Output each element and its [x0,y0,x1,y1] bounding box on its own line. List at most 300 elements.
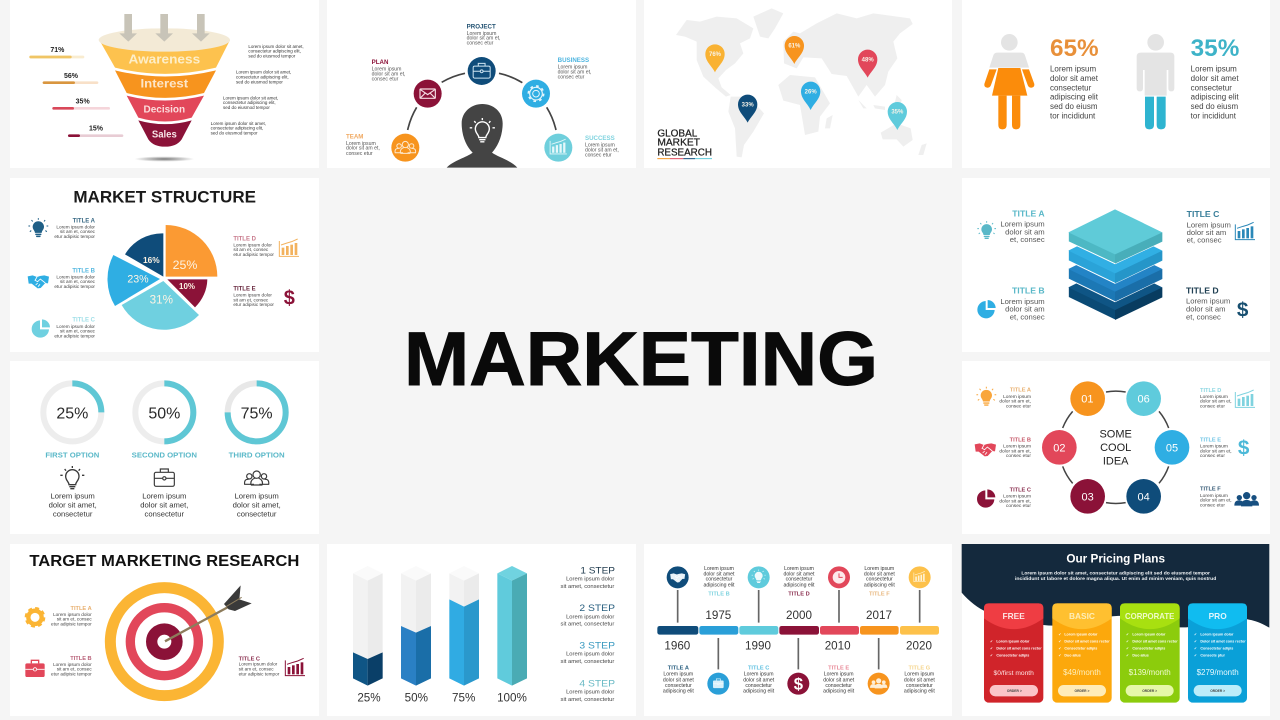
timeline years [664,609,932,652]
stat: 65% [1050,35,1099,120]
legend: title C: etur adipisic tempor [54,334,95,339]
legend: title A [977,208,1045,244]
legend: title B: Lorem ipsum [1003,444,1031,450]
legend: title A [976,387,1031,409]
ring: 25% first option [43,383,101,460]
stat: 65%: tor incididunt [1050,111,1096,120]
stat: 65%: Lorem ipsum [1050,65,1096,74]
step list: sit amet, consectetur [561,584,614,590]
map pins: 48% [862,57,874,63]
option descriptions: dolor sit amet, [49,500,97,509]
numbered nodes: 06 [1138,394,1150,406]
timeline titles and text: dolor sit amet [904,677,935,683]
panel: market structure [10,178,319,352]
pie chart: 31% [150,293,173,306]
option descriptions: dolor sit amet, [140,500,188,509]
numbered nodes: 05 [1166,442,1178,454]
bar: 100% [497,566,527,704]
legend: title C: etur adipisic tempor [239,671,280,676]
legend: title E: $ [284,287,295,309]
stat: 65%: 65% [1050,35,1099,62]
card: basic: ✓ [1058,647,1061,651]
timeline titles and text: dolor sit amet [663,677,694,683]
business node: Lorem ipsum [558,65,587,71]
legend: title B: etur adipisic tempor [51,672,92,677]
legend: title A: Lorem ipsum dolor [53,612,92,617]
card: corporate: Duo alius [1132,654,1149,658]
legend: title C [977,487,1031,509]
legend: title C: dolor sit am et, [999,498,1031,504]
legend: title C: Lorem ipsum dolor [239,662,278,667]
success node [544,134,619,162]
legend: title B [975,437,1031,459]
legend: title D: Lorem ipsum [1186,296,1230,305]
icon: outline people [245,471,269,485]
ring: 75% third option [228,383,286,460]
team node: Lorem ipsum [346,141,376,147]
card: corporate: ✓ [1126,633,1129,637]
stat: 65%: sed do eiusm [1050,102,1098,111]
timeline titles and text: consectetur [786,577,813,583]
legend: title C: TITLE C [1010,487,1031,493]
step list: sit amet, consectetur [561,621,614,627]
project node: consec etur [467,41,494,47]
cycle connectors [1063,391,1169,504]
legend: title E: dolor sit am et, [1200,448,1232,454]
step list: Lorem ipsum dolor [566,614,614,620]
legend: title E: $ [1238,437,1250,460]
timeline titles and text: Lorem ipsum [663,672,693,678]
funnel descriptions: consectetur adipiscing elit, [211,126,263,131]
legend: title A [27,606,92,627]
pie chart: 25% [173,258,197,272]
bar: 75% [449,566,479,704]
pie chart: 16% [143,255,160,265]
business node: consec etur [558,75,585,81]
timeline titles and text: TITLE A [668,665,689,671]
stat: 35%: Lorem ipsum [1191,65,1237,74]
center label [1099,428,1132,467]
legend: title D [1200,388,1255,409]
card: corporate: ✓ [1126,654,1129,658]
legend: title A [28,218,96,239]
card: corporate: ✓ [1126,647,1129,651]
legend: title C: TITLE C [72,318,96,324]
bar: 25%: 25% [357,691,381,704]
timeline years: 2020 [906,639,932,652]
panel: sales funnel [10,0,319,168]
timeline titles and text: Lorem ipsum [904,672,934,678]
timeline bar [657,626,939,635]
legend: title E [233,286,295,309]
card: pro: ORDER > [1210,689,1225,693]
funnel chart: Decision [143,105,185,116]
percentage bars: 56% [64,73,79,80]
step list: 2 STEP [579,603,615,613]
legend: title B: Lorem ipsum dolor [56,274,95,279]
card: pro: Consecte ptur [1200,654,1225,658]
icon: outline bulb [60,466,84,489]
heading: market structure: MARKET STRUCTURE [73,187,256,206]
team node [346,134,419,162]
team node: consec etur [346,151,373,157]
legend: title C: TITLE C [1187,209,1220,219]
card: basic: BASIC [1069,611,1095,621]
card: basic: ORDER > [1075,689,1089,693]
legend: title B: sit am et, consec [60,279,96,284]
icon: outline briefcase [154,469,174,486]
timeline titles and text: Lorem ipsum [864,566,894,572]
legend: title D: et, consec [1186,312,1221,321]
numbered nodes: 03 [1082,491,1094,503]
timeline titles and text: consectetur [665,683,692,689]
card: pro: ✓ [1194,647,1197,651]
heading: global market research: GLOBAL [657,129,698,140]
stat: 35% [1191,35,1239,120]
card: free: ✓ [990,654,993,658]
card: corporate: Lorem ipsum dolor [1132,633,1166,637]
card: corporate: Consectetur adipis [1132,647,1165,651]
step list: 4 STEP [579,679,615,689]
percentage bars: 71% [50,47,65,54]
legend: title C [1187,209,1255,245]
panel: pricing plans [962,544,1270,716]
icon: funnel arrows [119,14,210,42]
legend: title A: dolor sit am [1005,227,1045,236]
timeline titles and text: TITLE G [908,665,931,671]
legend: title D: TITLE D [1200,388,1221,394]
legend: title E: TITLE E [233,286,256,292]
stat: 35%: consectetur [1191,83,1232,92]
legend: title E: consec etur [1200,453,1225,459]
business node [522,57,591,108]
timeline titles and text: dolor sit amet [704,571,735,577]
legend: title B: etur adipisic tempor [54,284,95,289]
timeline titles and text: TITLE F [869,591,890,597]
legend: title A: Lorem ipsum [1000,220,1045,229]
timeline titles and text: adipiscing elit [743,689,775,695]
ring: 50% second option: SECOND OPTION [132,453,197,460]
legend: title B: Lorem ipsum dolor [53,662,92,667]
panel: world map [644,0,952,168]
option descriptions: consectetur [145,510,185,519]
legend: title C: Lorem ipsum [1187,221,1231,230]
panel: gender split [962,0,1270,168]
plan node: PLAN [372,59,389,66]
funnel chart: Sales [152,130,177,141]
timeline node icons: $ [794,675,804,694]
step list: 3 STEP [579,640,615,650]
icon: head with bulb [447,104,517,168]
timeline titles and text: consectetur [745,683,772,689]
card: free: ORDER > [1007,689,1022,693]
legend: title A: TITLE A [71,606,92,612]
pie chart: 23% [127,273,149,285]
arc connectors [408,73,556,130]
map pins: 33% [742,102,754,108]
timeline titles and text: TITLE D [788,591,810,597]
card: basic: Duo alius [1064,654,1081,658]
success node: consec etur [585,152,612,158]
funnel descriptions: sed do eiusmod tempor [211,131,258,136]
card: corporate: CORPORATE [1125,611,1175,621]
legend: title E: Lorem ipsum dolor [233,293,272,298]
panel: isometric bars [327,544,636,716]
legend: title A: consec etur [1006,403,1031,409]
funnel descriptions: consectetur adipiscing elit, [248,49,301,54]
project node: Lorem ipsum [467,31,496,37]
pie chart: 10% [179,282,195,291]
timeline titles and text: dolor sit amet [864,571,895,577]
timeline titles and text: adipiscing elit [704,582,735,588]
map pins [705,36,907,130]
legend: title A: dolor sit am et, [999,399,1031,405]
step list: sit amet, consectetur [561,659,614,665]
legend: title A: sit am et, consec [60,229,96,234]
legend: title B: dolor sit am et, [999,448,1031,454]
team node: dolor sit am et, [346,146,380,152]
center label: IDEA [1103,455,1129,467]
percentage bars: 15% [89,126,104,133]
card: free: Lorem ipsum dolor [996,639,1030,643]
pricing subtitle [1015,570,1216,582]
legend: title C: consec etur [1006,503,1031,509]
timeline titles and text: consectetur [706,577,733,583]
card: basic [1052,603,1112,703]
step list: 1 STEP [580,565,615,575]
card: basic: ✓ [1058,633,1061,637]
stat: 35%: 35% [1191,35,1239,62]
legend: title B: dolor sit am [1005,305,1045,314]
bar: 50% [401,566,431,704]
timeline titles and text: consectetur [825,683,852,689]
map pins: 76% [709,52,722,58]
card: pro: Dolor sit amet cons rector [1200,640,1246,644]
card: pro: $279/month [1197,668,1239,677]
timeline titles and text: Lorem ipsum [704,566,734,572]
card: basic: ✓ [1058,654,1061,658]
legend: title B [977,286,1045,321]
step list: sit amet, consectetur [561,697,614,703]
funnel descriptions: consectetur adipiscing elit, [223,100,276,105]
layer stack [1068,209,1162,320]
timeline titles and text: dolor sit amet [743,677,775,683]
ring: 75% third option: 75% [241,405,273,422]
card: basic: Consectetur adipis [1064,647,1097,651]
legend: title C: dolor sit am [1187,228,1226,237]
panel: hexagon cycle [962,361,1270,534]
option descriptions: Lorem ipsum [51,491,95,500]
center label: COOL [1100,442,1131,454]
project node: PROJECT [467,23,496,30]
step list: Lorem ipsum dolor [566,690,614,696]
percentage bars [29,47,123,137]
legend: title A: etur adipisic tempor [51,622,92,627]
funnel descriptions: sed do eiusmod tempor [236,79,283,84]
business node: BUSINESS [558,57,589,64]
option descriptions: dolor sit amet, [233,500,281,509]
timeline node icons [667,566,931,695]
panel: target marketing research [10,544,319,716]
success node: dolor sit am et, [585,147,619,153]
heading: target marketing research: TARGET MARKETING RESEARCH [29,553,299,570]
timeline titles and text: Lorem ipsum [824,672,854,678]
legend: title D: TITLE D [233,236,257,242]
numbered nodes: 01 [1081,394,1093,406]
option descriptions: consectetur [53,510,93,519]
bar: 100%: 100% [497,691,527,704]
card: pro: Consectetur adipis [1200,647,1233,651]
legend: title F [1200,487,1259,508]
legend: title E: sit am et, consec [233,297,269,302]
percentage bars: 35% [76,99,90,106]
legend: title D: sit am et, consec [233,247,269,252]
card: corporate: Dolor sit amet cons rector [1132,640,1178,644]
timeline titles and text: TITLE E [828,665,849,671]
legend: title C: Lorem ipsum dolor [56,324,95,329]
funnel descriptions: Lorem ipsum dolor sit amet, [248,44,304,49]
timeline titles and text: TITLE C [748,665,769,671]
panel: idea arc [327,0,636,168]
legend: title A: TITLE A [1010,387,1031,393]
heading: global market research [657,129,712,159]
heading: global market research: RESEARCH [657,147,712,158]
ring: 50% second option: 50% [148,405,180,422]
icon: arrow [165,585,252,641]
stat: 65%: dolor sit amet [1050,74,1099,83]
legend: title C: TITLE C [239,657,260,663]
legend: title F: consec etur [1200,502,1225,508]
card: free [984,603,1043,703]
legend: title B: TITLE B [70,656,92,662]
funnel descriptions: sed do eiusmod tempor [248,54,296,59]
funnel descriptions: sed do eiusmod tempor [223,105,270,110]
funnel chart: Awareness [128,51,200,66]
stat: 35%: tor incididunt [1191,111,1237,120]
ring: 25% first option: FIRST OPTION [45,453,99,460]
pricing subtitle: incididunt ut labore et dolore magna aliqua. Ut enim ad minim veniam, quis nostrud [1015,576,1216,582]
card: pro [1188,603,1247,703]
plan node [372,59,442,108]
card: pro: ✓ [1194,633,1197,637]
card: corporate: $139/month [1129,668,1171,677]
timeline titles and text: consectetur [906,683,933,689]
panel: stacked layers [962,178,1270,352]
timeline titles and text: dolor sit amet [823,677,855,683]
legend: title B: TITLE B [1010,437,1031,443]
step list: Lorem ipsum dolor [566,577,614,583]
pricing header background [962,544,1269,628]
card: free: ✓ [990,646,993,650]
panel: progress rings [10,361,319,534]
card: corporate [1120,603,1180,703]
icon: woman figure 65% [984,34,1034,129]
legend: title C: sit am et, consec [239,666,274,671]
card: free: FREE [1003,611,1025,621]
legend: title A: etur adipisic tempor [54,234,95,239]
card: pro: Lorem ipsum dolor [1200,633,1234,637]
legend: title C: et, consec [1187,236,1222,245]
pricing subtitle: Lorem ipsum dolor sit amet, consectetur adipiscing elit sed do eiusmod tempor [1021,570,1210,576]
panel: timeline [644,544,952,716]
legend: title E: Lorem ipsum [1200,444,1228,450]
stat: 65%: consectetur [1050,83,1092,92]
card: free: Consectetur adipis [996,654,1029,658]
legend: title D: Lorem ipsum dolor [233,243,272,248]
heading: our pricing plans: Our Pricing Plans [1066,552,1165,566]
map pins: 35% [891,110,904,116]
card: pro: ✓ [1194,640,1197,644]
timeline years: 2017 [866,609,892,622]
card: basic: Dolor sit amet cons rector [1064,640,1110,644]
bar: 50%: 50% [405,691,428,704]
legend: title E: etur adipisic tempor [233,302,274,307]
stat: 35%: sed do eiusm [1191,102,1239,111]
legend: title F: TITLE F [1200,487,1221,493]
funnel descriptions: Lorem ipsum dolor sit amet, [223,95,278,100]
legend: title D: TITLE D [1186,286,1219,296]
timeline connectors [678,590,920,669]
plan node: dolor sit am et, [372,72,405,78]
legend: title D: etur adipisic tempor [233,252,274,257]
success node: SUCCESS [585,135,615,142]
timeline years: 1975 [705,609,731,622]
bar: 75%: 75% [452,691,475,704]
timeline years: 2000 [786,609,812,622]
legend: title E [1200,437,1250,460]
plan node: consec etur [372,77,399,83]
title: MARKETING: MARKETING [404,317,878,402]
legend: title A: sit am et, consec [57,617,92,622]
option descriptions [49,491,281,519]
map pins: 61% [788,44,801,50]
legend: title D [1186,286,1249,321]
business node: dolor sit am et, [558,70,591,76]
stat: 35%: dolor sit amet [1191,74,1239,83]
step list [561,565,615,703]
legend: title B: consec etur [1006,453,1031,459]
legend: title A: Lorem ipsum [1003,394,1031,400]
card: corporate: ✓ [1126,640,1129,644]
map pins: 26% [805,89,817,95]
ring: 75% third option: THIRD OPTION [229,453,285,460]
step list: Lorem ipsum dolor [566,652,614,658]
card: pro: ✓ [1194,654,1197,658]
timeline titles and text: adipiscing elit [823,689,855,695]
stat: 65%: adipiscing elit [1050,93,1099,102]
timeline titles and text: adipiscing elit [784,582,815,588]
legend: title D: consec etur [1200,403,1225,409]
legend: title F: dolor sit am et, [1200,498,1232,504]
option descriptions: Lorem ipsum [235,491,279,500]
card: free: $0/first month [994,670,1034,677]
project node: dolor sit am et, [467,36,500,42]
timeline titles and text: TITLE B [708,591,730,597]
legend: title C [239,657,305,676]
legend: title A: TITLE A [1012,208,1045,218]
center label: SOME [1099,428,1132,440]
numbered nodes: 04 [1138,491,1150,503]
project node [467,23,500,85]
legend: title D [233,236,299,257]
funnel descriptions: Lorem ipsum dolor sit amet, [211,121,266,126]
plan node: Lorem ipsum [372,67,401,73]
target rings [110,588,218,696]
timeline titles and text: dolor sit amet [784,571,815,577]
card: basic: ✓ [1058,640,1061,644]
funnel descriptions: Lorem ipsum dolor sit amet, [236,70,291,75]
numbered nodes: 02 [1053,442,1065,454]
